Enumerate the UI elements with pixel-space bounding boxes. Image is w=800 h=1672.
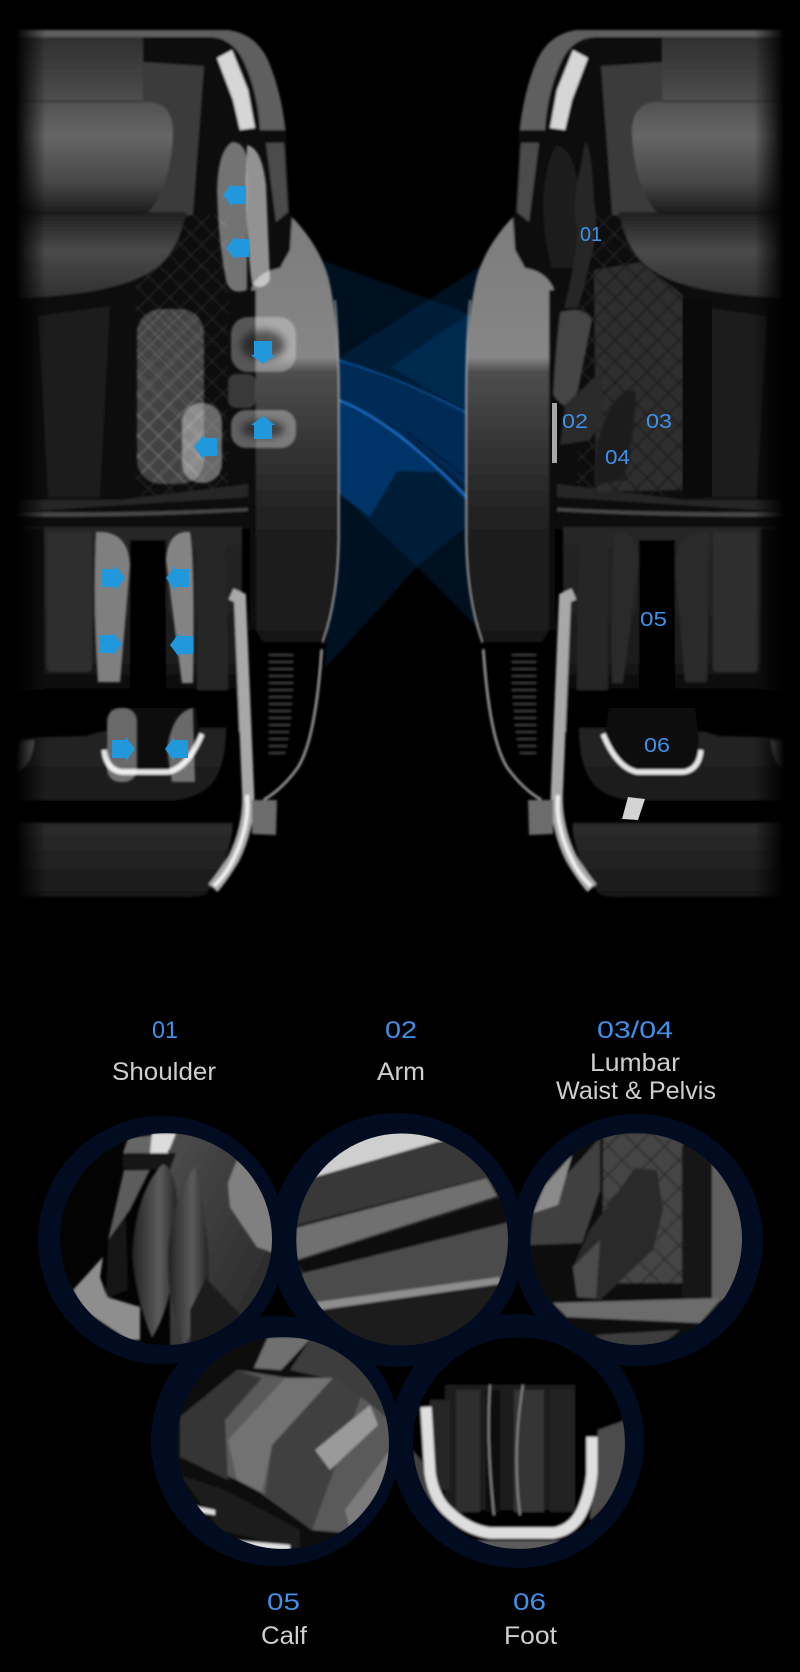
right chair: armrest latch — [552, 403, 557, 463]
label: 01 shoulder: 01 — [152, 1017, 178, 1044]
calf airbag right — [166, 532, 194, 683]
right chair: zone numbers: 05 — [640, 609, 667, 631]
lumbar airbag — [137, 309, 204, 484]
right chair: arm airbag lower shade — [560, 372, 603, 445]
chair edge fades — [0, 20, 800, 910]
left chair: blue direction arrows — [99, 183, 275, 761]
left fabric panel — [38, 306, 110, 497]
right chair: zone numbers: 06 — [644, 735, 670, 757]
label: 06 foot — [504, 1589, 557, 1650]
circle 1: shoulder photo — [60, 1133, 280, 1347]
label: 06 foot: Foot — [504, 1622, 557, 1650]
label: 05 calf — [261, 1589, 307, 1650]
lumbar airbag quilting — [137, 309, 204, 484]
armrest — [250, 217, 339, 642]
circle 2: arm photo — [296, 1130, 510, 1346]
calf bolsters — [96, 532, 130, 682]
label: 02 arm: Arm — [377, 1058, 425, 1086]
foot well — [106, 708, 200, 770]
label: 03/04 lumbar waist and pelvis: 03/04 — [597, 1017, 673, 1044]
right chair base — [466, 30, 791, 897]
upper arm airbag — [231, 317, 296, 372]
base panel — [14, 823, 232, 897]
side panel — [143, 62, 204, 262]
side chrome trim — [213, 594, 248, 888]
label: 02 arm — [377, 1017, 425, 1086]
label: 01 shoulder: Shoulder — [112, 1058, 216, 1086]
right chair: zone numbers — [562, 224, 672, 757]
right chair: zone numbers: 02 — [562, 411, 588, 433]
lower arm airbag — [231, 410, 296, 448]
blue crossed light bands — [322, 260, 490, 668]
head frame band — [14, 30, 286, 135]
right chair: lumbar airbag — [595, 390, 636, 485]
label: 01 shoulder — [112, 1017, 216, 1086]
outer leg bolster — [197, 535, 228, 690]
waist band — [14, 484, 249, 529]
lower back pad — [14, 212, 186, 298]
hardware — [240, 130, 290, 268]
label: 03/04 lumbar waist and pelvis — [556, 1017, 716, 1105]
U trim — [104, 734, 202, 772]
right chair: zone numbers: 03 — [646, 411, 672, 433]
calf panel — [47, 532, 92, 672]
quilted lumbar — [136, 215, 228, 497]
label: 05 calf: 05 — [267, 1589, 300, 1616]
label: 03/04 lumbar waist and pelvis: Waist & Pelvis — [556, 1077, 716, 1105]
right chair: quilted lumbar — [594, 262, 683, 492]
zone rings — [38, 1113, 763, 1568]
left chair: airbag overlays — [94, 142, 296, 782]
chrome strip — [217, 50, 255, 130]
shoulder airbag 2 — [246, 145, 270, 287]
label: 03/04 lumbar waist and pelvis: Lumbar — [590, 1049, 680, 1077]
circle 5: foot photo — [412, 1337, 626, 1550]
pillow — [14, 102, 173, 215]
shoulder airbag 1 — [217, 142, 247, 292]
waist airbag — [182, 403, 222, 483]
headrest upper panel — [14, 37, 143, 101]
right chair: chrome accent — [622, 797, 645, 820]
base foot — [252, 800, 277, 835]
calf airbag left — [94, 532, 130, 682]
foot airbag left — [107, 708, 137, 782]
circle 4: calf photo — [177, 1337, 392, 1550]
right chair: arm airbag — [553, 310, 592, 407]
left chair base — [14, 30, 339, 897]
label: 06 foot: 06 — [513, 1589, 546, 1616]
right chair: zone numbers: 04 — [605, 447, 630, 469]
vent slats — [269, 655, 293, 753]
label: 02 arm: 02 — [385, 1017, 417, 1044]
arm airbag inner shadows — [241, 330, 285, 438]
leg well — [14, 527, 242, 732]
circle 3: lumbar photo — [530, 1133, 744, 1346]
arm pad — [228, 374, 256, 408]
label: 05 calf: Calf — [261, 1622, 307, 1650]
foot airbag right — [167, 708, 195, 782]
foot plate — [14, 728, 226, 800]
lower arm cover — [263, 640, 324, 800]
right chair: zone numbers: 01 — [580, 224, 602, 246]
right chair: dark fabric column — [683, 298, 712, 497]
right chair: shoulder airbags — [543, 142, 596, 308]
